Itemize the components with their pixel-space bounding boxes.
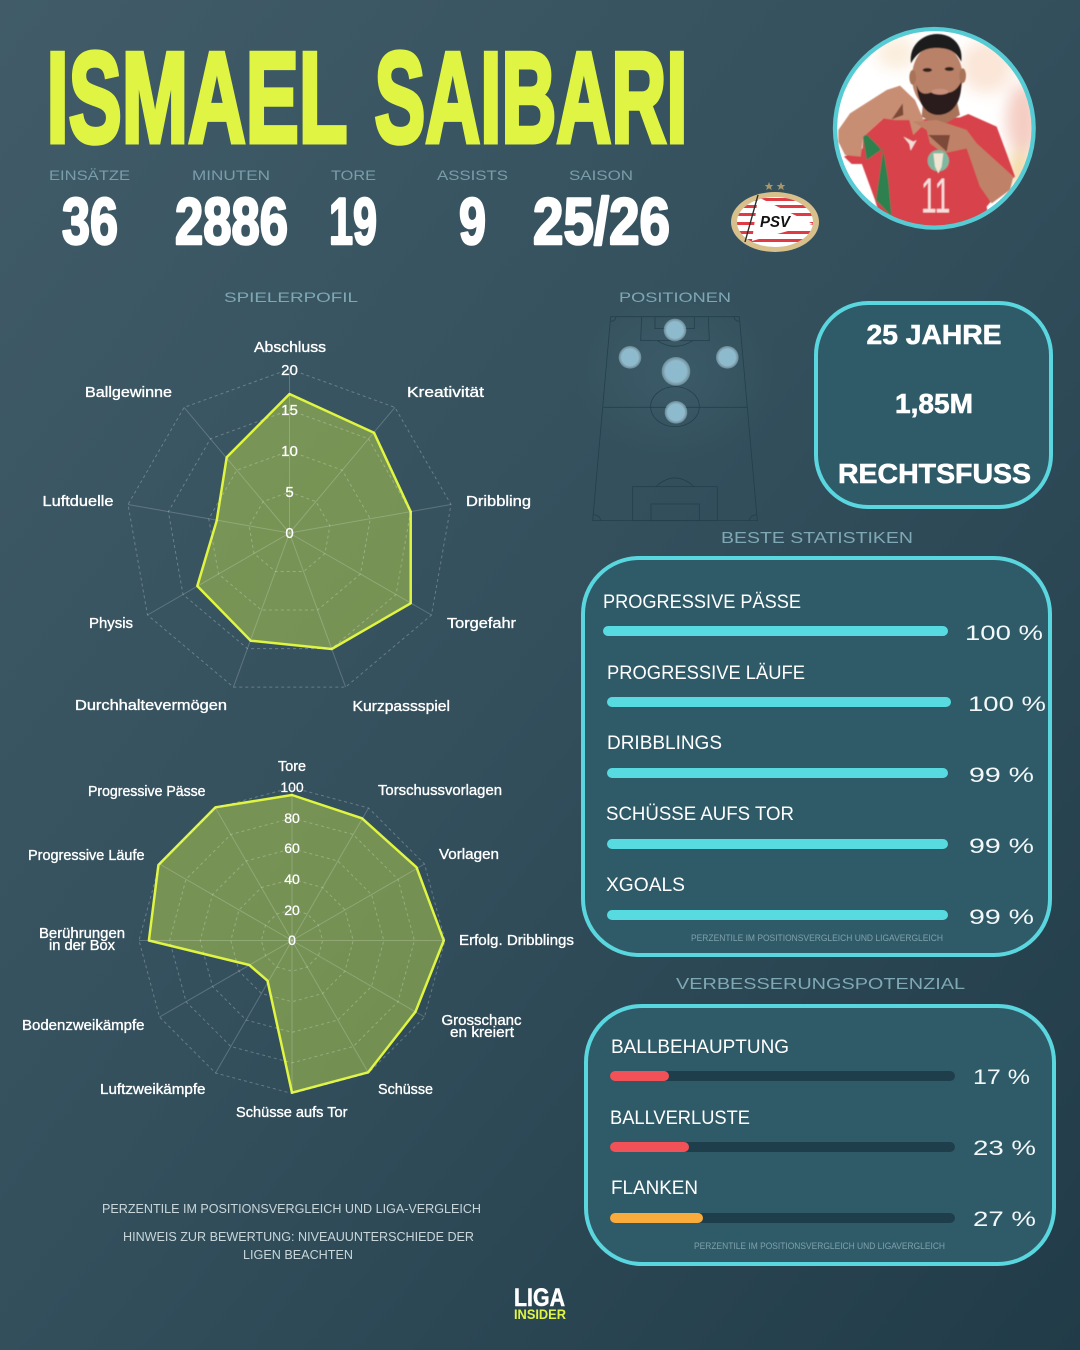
stat bar: Dribblings: DRIBBLINGS (607, 732, 722, 754)
position dot: central midfield (665, 401, 687, 424)
player photo (834, 28, 1040, 228)
stat: Minuten: MINUTEN (192, 168, 270, 183)
panel: bio facts: RECHTSFUSS (838, 458, 1031, 489)
radar chart: player profile: Kurzpassspiel (352, 699, 450, 715)
heading: Positionen: POSITIONEN (619, 289, 731, 305)
radar chart: percentiles: Schüsse aufs Tor (236, 1105, 348, 1121)
left arm and hand (838, 86, 925, 157)
stat bar: Flanken (610, 1177, 1036, 1231)
radar chart: percentiles: 60 (284, 840, 300, 856)
stat: Saison: SAISON (569, 168, 633, 183)
panel: bio facts: 1,85M (895, 388, 973, 419)
position dot: right wing (716, 346, 739, 369)
panel: bio facts (816, 303, 1051, 507)
note: percentile basis: PERZENTILE IM POSITIONSVERGLEICH UND LIGAVERGLEICH (694, 1241, 945, 1251)
radar chart: player profile: Kreativität (407, 385, 484, 401)
radar chart: player profile: 0 (285, 525, 294, 542)
radar chart: percentiles (22, 759, 574, 1121)
radar chart: percentiles: 20 (284, 902, 300, 918)
radar chart: percentiles: Schüsse (378, 1082, 433, 1098)
position dot: attacking midfield (662, 357, 690, 386)
radar chart: percentiles: Torschussvorlagen (378, 783, 502, 799)
stat bar: Ballbehauptung (610, 1036, 1030, 1089)
stat: Minuten: 2886 (175, 184, 288, 258)
stat bar: Progressive Läufe: PROGRESSIVE LÄUFE (607, 662, 805, 684)
footnote text: PERZENTILE IM POSITIONSVERGLEICH UND LIGA-VERGLEICH (102, 1201, 481, 1216)
position dot: left wing (619, 346, 641, 369)
radar chart: percentiles: Bodenzweikämpfe (22, 1018, 144, 1034)
radar chart: percentiles: Erfolg. Dribblings (459, 933, 574, 949)
radar chart: percentiles: Tore (278, 759, 306, 775)
stat bar: xGoals: XGOALS (606, 874, 685, 896)
stat bar: Ballverluste: 23 % (973, 1136, 1036, 1160)
stat bar: Schüsse aufs Tor: SCHÜSSE AUFS TOR (606, 803, 794, 825)
stat bar: Ballverluste (610, 1107, 1036, 1160)
footnote text: HINWEIS ZUR BEWERTUNG: NIVEAUUNTERSCHIEDE DER (123, 1229, 474, 1244)
face (912, 47, 963, 102)
radar chart: percentiles: Vorlagen (439, 847, 499, 863)
stat bar: Schüsse aufs Tor (606, 803, 1034, 858)
footnote text (102, 1201, 481, 1262)
right hand and forearm (913, 120, 1013, 203)
title: ISMAEL (46, 26, 348, 170)
stat: Tore: 19 (329, 184, 377, 258)
logo: Liga Insider: LIGA (514, 1284, 565, 1312)
neck (921, 102, 960, 124)
radar chart: percentiles: 0 (288, 932, 296, 948)
radar chart: percentiles: in der Box (49, 938, 116, 954)
stat: Assists (437, 168, 508, 258)
radar chart: percentiles: 100 (280, 779, 304, 795)
radar chart: percentiles: Progressive Läufe (28, 848, 144, 864)
radar polygon: percentile values (149, 795, 444, 1093)
radar chart: player profile: 20 (281, 362, 298, 379)
title: SAIBARI (374, 26, 688, 170)
stat: Einsätze: 36 (62, 184, 118, 258)
beard (917, 82, 961, 115)
stat: Saison: 25/26 (533, 184, 670, 258)
stat bar: Schüsse aufs Tor: 99 % (969, 834, 1034, 858)
stat bar: Progressive Läufe: 100 % (968, 692, 1046, 716)
radar chart: player profile: Physis (89, 616, 133, 632)
radar chart: player profile: 5 (285, 484, 294, 501)
radar chart: player profile: Abschluss (254, 340, 326, 356)
radar chart: percentiles: en kreiert (450, 1025, 514, 1041)
logo: Liga Insider (514, 1284, 566, 1322)
stat: Minuten (175, 168, 288, 258)
radar chart: player profile: 15 (281, 402, 298, 419)
stat bar: Dribblings: 99 % (969, 763, 1034, 787)
puma logo (903, 137, 917, 151)
radar chart: player profile (42, 340, 531, 715)
radar chart: percentiles: Progressive Pässe (88, 784, 206, 800)
radar chart: player profile: Torgefahr (447, 616, 516, 632)
stat: Einsätze: EINSÄTZE (49, 168, 130, 183)
footnote text: LIGEN BEACHTEN (243, 1247, 353, 1262)
stat bar: Dribblings (607, 732, 1034, 787)
stat bar: Flanken: FLANKEN (611, 1177, 698, 1199)
heading: Verbesserungspotenzial: VERBESSERUNGSPOTENZIAL (676, 976, 965, 993)
radar chart: percentiles: Grosschanc (442, 1013, 522, 1029)
radar chart: player profile: Durchhaltevermögen (75, 698, 227, 714)
panel: improvement potential (586, 1006, 1054, 1264)
icon: PSV club crest (731, 182, 819, 252)
radar chart: player profile: 10 (281, 443, 298, 460)
shirt number: 11 (921, 169, 950, 224)
stat: Assists: ASSISTS (437, 168, 508, 183)
stat bar: xGoals: 99 % (969, 905, 1034, 929)
stat bar: Progressive Läufe (607, 662, 1046, 716)
radar chart: percentiles: Berührungen (39, 926, 125, 942)
stat bar: Ballbehauptung: 17 % (973, 1065, 1030, 1089)
stat: Tore: TORE (331, 168, 376, 183)
stat bar: Ballverluste: BALLVERLUSTE (610, 1107, 750, 1129)
radar chart: percentiles: Luftzweikämpfe (100, 1082, 206, 1098)
stat bar: Progressive Pässe: PROGRESSIVE PÄSSE (603, 591, 801, 613)
panel: best stats (583, 558, 1050, 955)
stat bar: Progressive Pässe: 100 % (965, 621, 1043, 645)
radar chart: percentiles: 40 (284, 871, 300, 887)
shirt (862, 110, 1015, 227)
stat: Assists: 9 (459, 184, 486, 258)
hair (911, 34, 962, 63)
stat bar: xGoals (606, 874, 1034, 929)
note: percentile basis: PERZENTILE IM POSITIONSVERGLEICH UND LIGAVERGLEICH (691, 933, 943, 943)
position dot: forward (664, 319, 686, 341)
stat bar: Progressive Pässe (603, 591, 1043, 645)
icon: PSV club crest: PSV (760, 214, 791, 231)
crest (928, 150, 949, 171)
panel: bio facts: 25 JAHRE (866, 319, 1002, 350)
heading: Beste Statistiken: BESTE STATISTIKEN (721, 530, 913, 547)
radar chart: player profile: Dribbling (466, 494, 531, 510)
radar polygon: profile values (197, 394, 411, 649)
stat bar: Flanken: 27 % (973, 1207, 1036, 1231)
radar chart: player profile: Luftduelle (42, 494, 114, 510)
logo: Liga Insider: INSIDER (514, 1306, 566, 1322)
stat: Tore (329, 168, 377, 258)
radar chart: percentiles: 80 (284, 810, 300, 826)
heading: Spielerprofil: SPIELERPOFIL (224, 289, 358, 305)
radar chart: player profile: Ballgewinne (85, 385, 172, 401)
stat: Einsätze (49, 168, 130, 258)
stat bar: Ballbehauptung: BALLBEHAUPTUNG (611, 1036, 789, 1058)
pitch with position heat dots (575, 287, 775, 521)
